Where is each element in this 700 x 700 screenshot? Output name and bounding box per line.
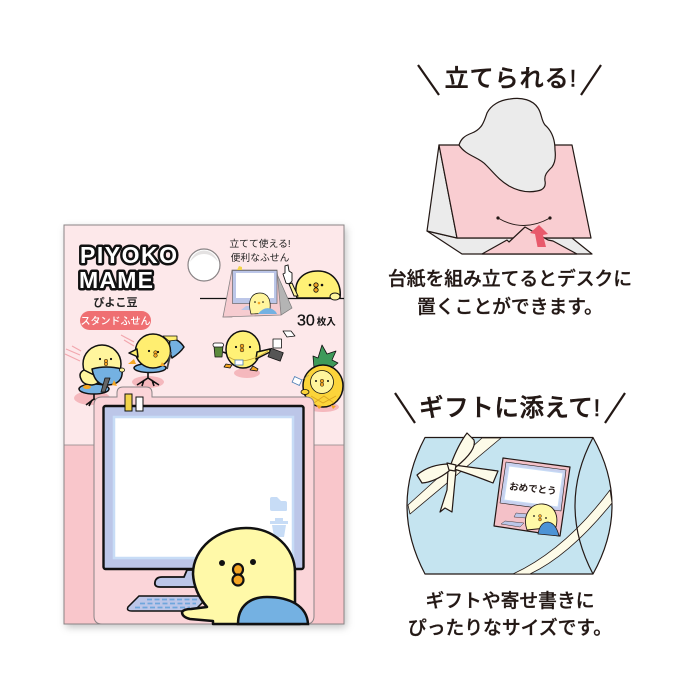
logo: PIYOKO MAME bbox=[79, 242, 177, 293]
monitor screen bbox=[114, 417, 293, 558]
monitor stand and base bbox=[155, 570, 197, 587]
text: gift description: ぴったりなサイズです。 bbox=[408, 616, 612, 638]
text: stand description: 台紙を組み立てるとデスクに bbox=[388, 267, 632, 289]
ribbon bands bbox=[408, 438, 501, 514]
monitor bbox=[104, 406, 304, 569]
mini standing note illustration bbox=[223, 266, 292, 317]
text: stand description bbox=[388, 267, 632, 317]
logo: PIYOKO MAME: MAME bbox=[79, 267, 153, 293]
icon: folder bbox=[270, 497, 287, 511]
panel: stand feature bbox=[388, 65, 632, 317]
illustration: folded stand card bbox=[427, 98, 592, 254]
text: gift description: ギフトや寄せ書きに bbox=[425, 590, 595, 611]
text: stand caption: 立てて使える! bbox=[229, 237, 291, 250]
heading: can stand bbox=[418, 65, 601, 95]
chick peeking at top right bbox=[283, 265, 340, 300]
illustration: gift pillow box bbox=[407, 433, 612, 574]
arrow bbox=[530, 225, 548, 247]
heading: can stand: 立てられる! bbox=[445, 66, 577, 92]
text: gift description bbox=[408, 590, 612, 638]
chick with coffee and phone bbox=[213, 331, 295, 378]
text: stand caption: 便利なふせん bbox=[231, 251, 290, 264]
hang hole bbox=[188, 249, 220, 281]
text: brand name: ぴよこ豆 bbox=[94, 296, 138, 309]
panel: product package card bbox=[64, 225, 344, 624]
chick on chair, centre bbox=[121, 334, 184, 388]
slit bbox=[498, 218, 550, 226]
sticky note pad bbox=[94, 387, 314, 624]
heading: add to gift: ギフトに添えて! bbox=[419, 394, 601, 422]
logo: PIYOKO MAME: PIYOKO bbox=[80, 242, 177, 268]
desk line bbox=[200, 298, 344, 300]
text: stand caption bbox=[229, 237, 291, 264]
text: stand description: 置くことができます。 bbox=[417, 296, 603, 317]
chick on chair, left bbox=[65, 345, 124, 406]
badge: stand sticky note: スタンドふせん bbox=[80, 316, 150, 328]
mini note greeting: おめでとう bbox=[509, 482, 557, 497]
text: 30 sheets: 枚入 bbox=[317, 316, 336, 328]
pink flap bbox=[482, 227, 577, 254]
chick in pineapple costume bbox=[292, 345, 343, 412]
panel: gift feature bbox=[395, 393, 625, 638]
large chick bbox=[182, 528, 308, 624]
text: 30 sheets: 30 bbox=[297, 312, 315, 330]
badge: stand sticky note bbox=[80, 311, 151, 330]
mini note on gift bbox=[494, 458, 570, 536]
ribbon bow bbox=[440, 470, 456, 512]
sticky note blob bbox=[459, 98, 555, 192]
keyboard bbox=[128, 596, 209, 611]
icon: trash bbox=[270, 518, 288, 537]
clips bbox=[125, 394, 143, 411]
